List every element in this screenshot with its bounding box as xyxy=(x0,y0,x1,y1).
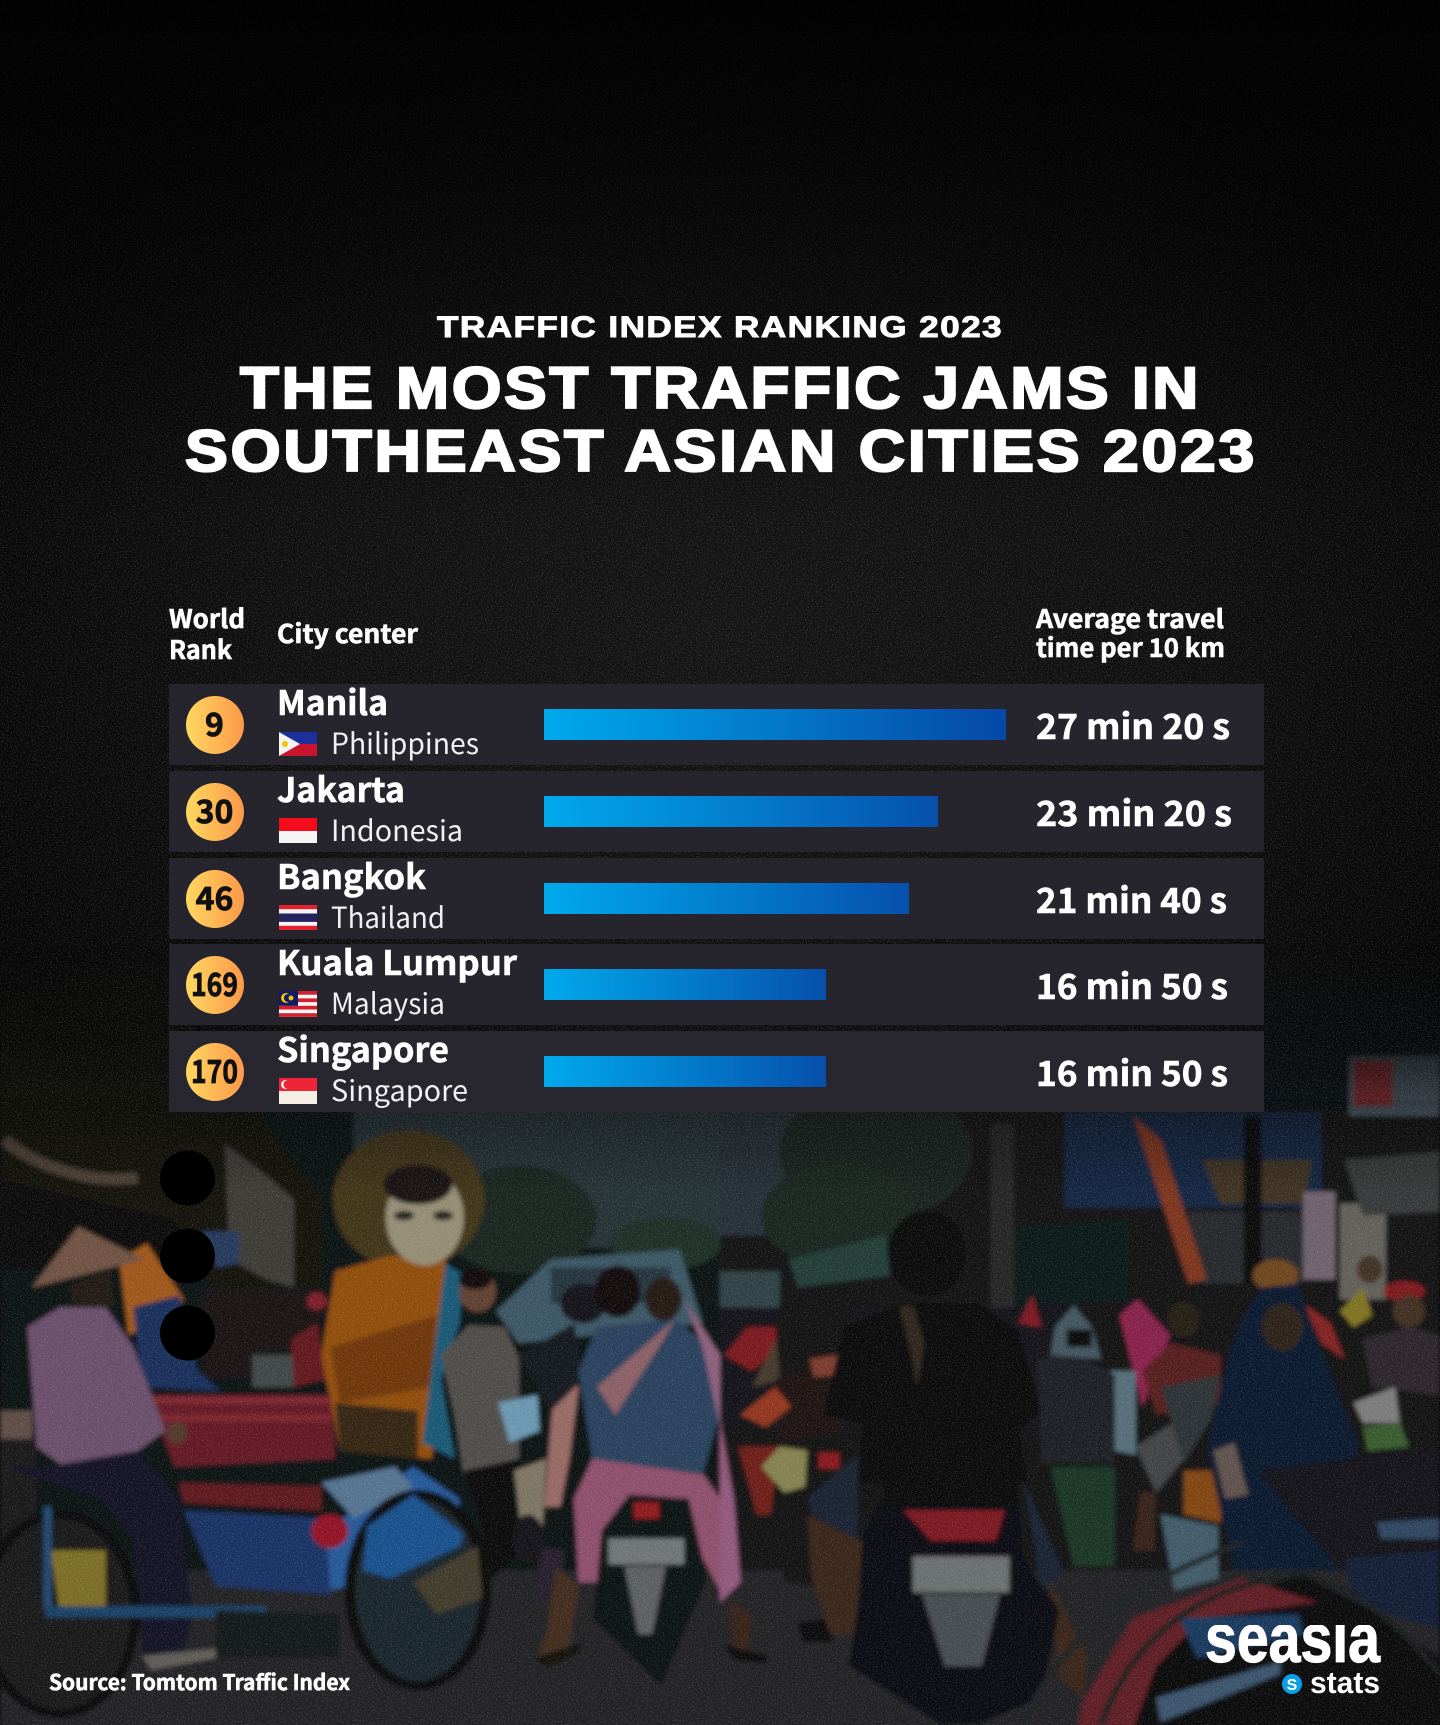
table headers xyxy=(169,599,1225,667)
table headers: time per 10 km xyxy=(1036,628,1225,665)
flag: Thailand xyxy=(279,905,317,930)
top darkening xyxy=(0,0,1440,520)
row: Manila: Manila xyxy=(277,676,388,725)
source note: Source: Tomtom Traffic Index xyxy=(49,1666,350,1697)
photo right half xyxy=(716,1054,1440,1725)
photo left half xyxy=(0,1112,724,1725)
flag: Singapore xyxy=(279,1078,317,1104)
row: Bangkok: Thailand xyxy=(331,895,445,937)
row: Manila xyxy=(169,676,1264,765)
row: Kuala Lumpur: Kuala Lumpur xyxy=(277,936,517,985)
row: Kuala Lumpur: 169 xyxy=(191,960,238,1006)
black dots xyxy=(160,1150,215,1360)
row: Kuala Lumpur xyxy=(169,936,1264,1025)
logo: seasia stats: S xyxy=(1287,1677,1298,1694)
row: Jakarta xyxy=(169,763,1264,852)
flag: Philippines xyxy=(279,732,317,756)
row: Singapore: Singapore xyxy=(331,1068,468,1110)
flag: Indonesia xyxy=(279,818,317,843)
flag: Malaysia xyxy=(279,991,317,1017)
title xyxy=(185,356,1257,484)
photo dimming xyxy=(0,1100,1440,1725)
row: Jakarta: Jakarta xyxy=(277,763,405,812)
row: Kuala Lumpur: 16 min 50 s xyxy=(1036,959,1228,1010)
title: SOUTHEAST ASIAN CITIES 2023 xyxy=(185,419,1257,484)
subtitle: TRAFFIC INDEX RANKING 2023 xyxy=(437,311,1003,344)
logo: seasia stats xyxy=(1206,1625,1381,1694)
table headers: Average travel xyxy=(1035,599,1224,636)
table headers: City center xyxy=(277,614,419,651)
row: Singapore xyxy=(169,1023,1264,1112)
logo: seasia stats: stats xyxy=(1310,1665,1380,1700)
row: Bangkok xyxy=(169,850,1264,939)
row: Manila: Philippines xyxy=(331,721,479,763)
row: Manila: 9 xyxy=(205,700,224,746)
photo: street market traffic xyxy=(0,1053,1440,1725)
row: Jakarta: 30 xyxy=(196,787,233,833)
row: Bangkok: 46 xyxy=(196,874,233,920)
row: Singapore: Singapore xyxy=(277,1023,449,1072)
logo: seasia stats: seasia xyxy=(1205,1600,1381,1677)
row: Jakarta: Indonesia xyxy=(331,808,463,850)
row: Singapore: 170 xyxy=(191,1047,238,1093)
row: Bangkok: 21 min 40 s xyxy=(1036,873,1227,924)
row: Bangkok: Bangkok xyxy=(277,850,426,899)
row: Manila: 27 min 20 s xyxy=(1036,699,1230,750)
table headers: Rank xyxy=(169,630,233,667)
table headers: World xyxy=(169,599,245,636)
row: Singapore: 16 min 50 s xyxy=(1036,1046,1228,1097)
title: THE MOST TRAFFIC JAMS IN xyxy=(240,356,1201,421)
row: Jakarta: 23 min 20 s xyxy=(1036,786,1232,837)
row: Kuala Lumpur: Malaysia xyxy=(331,981,445,1023)
